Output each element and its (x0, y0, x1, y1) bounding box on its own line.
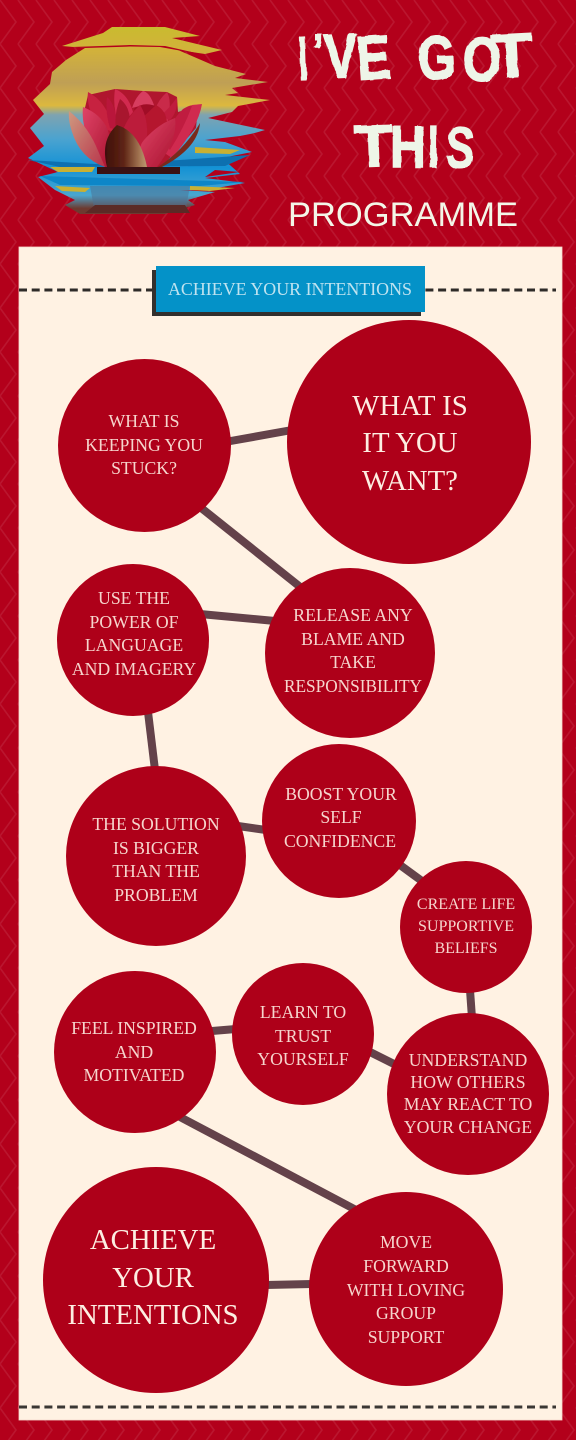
step: create life supportive beliefs: CREATE LIFE (417, 896, 515, 913)
step: the solution is bigger: IS BIGGER (113, 838, 199, 858)
step: what is it you want (287, 320, 531, 564)
step: release any blame: RELEASE ANY (293, 605, 413, 625)
step: create life supportive beliefs (400, 861, 532, 993)
step: the solution is bigger (66, 766, 246, 946)
step: use the power of language: USE THE (98, 588, 170, 608)
step: what is it you want: IT YOU (362, 427, 458, 459)
title: V (323, 21, 359, 91)
step: use the power of language: POWER OF (90, 612, 179, 632)
step: move forward with loving group support: GROUP (376, 1303, 436, 1323)
step: achieve your intentions: YOUR (112, 1262, 195, 1294)
title: E (354, 23, 393, 94)
outer right petal (158, 123, 200, 167)
step: understand how others may react: MAY REACT TO (404, 1094, 532, 1114)
step: release any blame: TAKE (330, 652, 376, 672)
step: what is keeping you stuck: WHAT IS (109, 411, 179, 431)
step: the solution is bigger: THAN THE (112, 861, 200, 881)
title (297, 20, 534, 181)
connector lines (148, 430, 472, 1285)
title: T (353, 113, 394, 180)
title: H (390, 114, 426, 180)
outer left petal (69, 111, 105, 167)
step: learn to trust yourself: LEARN TO (260, 1002, 346, 1022)
image: lotus on water (28, 27, 270, 214)
step: boost your self confidence (262, 744, 416, 898)
step: understand how others may react: HOW OTHERS (410, 1072, 526, 1092)
step: what is keeping you stuck: KEEPING YOU (85, 435, 203, 455)
title: T (489, 20, 534, 91)
step: feel inspired and motivated: FEEL INSPIRED (71, 1018, 197, 1038)
step: move forward with loving group support (309, 1192, 503, 1386)
waterline (97, 167, 180, 174)
step: move forward with loving group support: WITH LOVING (347, 1280, 465, 1300)
banner: achieve your intentions (152, 266, 425, 316)
inner petals (140, 105, 167, 160)
step: release any blame (265, 568, 435, 738)
title: I (428, 114, 439, 180)
top dashed rule (19, 288, 556, 292)
step: understand how others may react: YOUR CHANGE (404, 1117, 532, 1137)
step: create life supportive beliefs: SUPPORTIVE (418, 918, 514, 935)
step: boost your self confidence: BOOST YOUR (285, 784, 397, 804)
step: feel inspired and motivated: MOTIVATED (84, 1065, 185, 1085)
left big petal (83, 107, 112, 167)
right big petal (140, 118, 175, 167)
step: learn to trust yourself (232, 963, 374, 1105)
far back petals (88, 92, 114, 132)
step: the solution is bigger: THE SOLUTION (92, 814, 220, 834)
step: understand how others may react: UNDERSTAND (409, 1050, 527, 1070)
bottom dashed rule (19, 1406, 556, 1408)
step: use the power of language: AND IMAGERY (72, 659, 196, 679)
step: create life supportive beliefs: BELIEFS (434, 940, 498, 957)
step: release any blame: RESPONSIBILITY (284, 676, 422, 696)
step: move forward with loving group support: FORWARD (363, 1256, 449, 1276)
step: feel inspired and motivated (54, 971, 216, 1133)
step: achieve your intentions: INTENTIONS (67, 1299, 239, 1331)
step: use the power of language: LANGUAGE (85, 635, 183, 655)
title: S (444, 114, 476, 181)
water stripes (28, 132, 260, 192)
step: learn to trust yourself: YOURSELF (257, 1049, 349, 1069)
brush painted background (28, 27, 270, 214)
step: use the power of language (57, 564, 209, 716)
subtitle: PROGRAMME (288, 196, 518, 234)
flower (69, 89, 202, 167)
step: achieve your intentions: ACHIEVE (90, 1224, 216, 1256)
brush gap (72, 45, 205, 55)
step: understand how others may react (387, 1013, 549, 1175)
step: the solution is bigger: PROBLEM (114, 885, 198, 905)
step: feel inspired and motivated: AND (115, 1042, 153, 1062)
step: release any blame: BLAME AND (301, 629, 405, 649)
title: ’ (312, 24, 324, 76)
right upper petals (160, 104, 202, 158)
title: I (297, 24, 309, 94)
step: boost your self confidence: CONFIDENCE (284, 831, 396, 851)
step: what is it you want: WANT? (362, 465, 458, 497)
title: G (416, 22, 457, 93)
banner: achieve your intentions: ACHIEVE YOUR INTENTIONS (168, 279, 412, 299)
step: what is keeping you stuck: STUCK? (111, 458, 177, 478)
flower reflection (90, 186, 190, 208)
step: what is keeping you stuck (58, 359, 231, 532)
backing silhouette (84, 89, 198, 167)
step: learn to trust yourself: TRUST (275, 1026, 331, 1046)
step: what is it you want: WHAT IS (352, 390, 468, 422)
panel: main content (19, 247, 562, 1420)
step: move forward with loving group support: SUPPORT (368, 1327, 444, 1347)
step: achieve your intentions (43, 1167, 269, 1393)
central bud (105, 125, 147, 167)
step: move forward with loving group support: MOVE (380, 1232, 432, 1252)
step: boost your self confidence: SELF (320, 807, 362, 827)
title: O (462, 24, 503, 95)
